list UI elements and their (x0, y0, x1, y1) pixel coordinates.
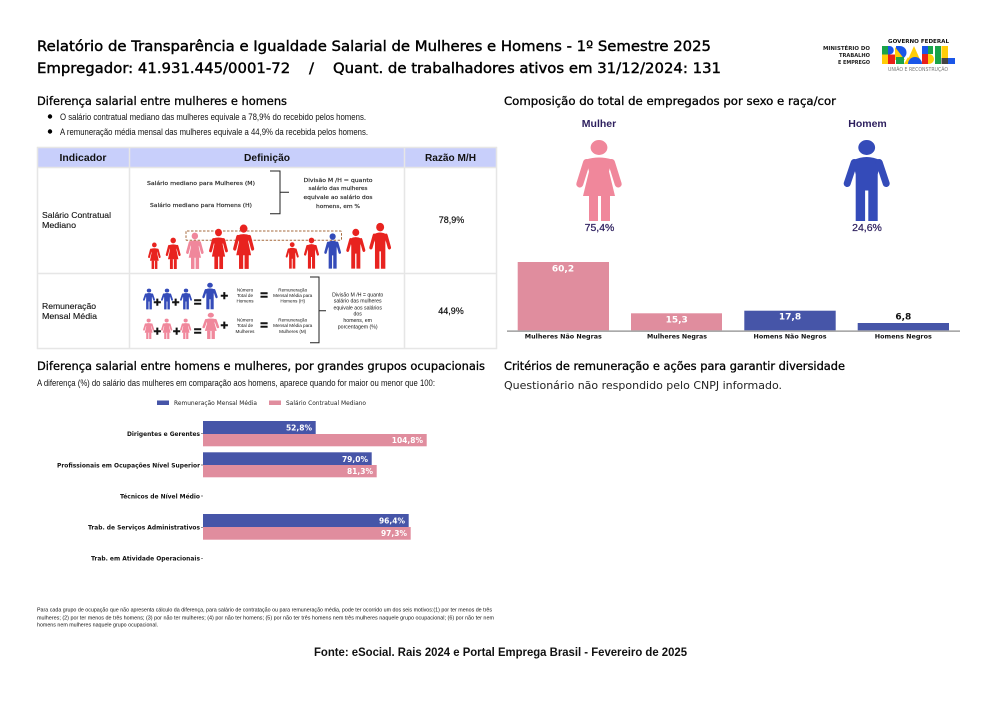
equation: men: Remuneração (278, 288, 308, 292)
ministry logo text: MINISTÉRIO DO (823, 44, 871, 52)
equation: men: Mensal Média para (273, 293, 313, 298)
bar chart: composition by sex and race: 15,3 (666, 316, 688, 326)
title: Relatório de Transparência e Igualdade Salarial de Mulheres e Homens - 1º Semestre 2025 (37, 39, 711, 55)
group: professionals: 81,3% (347, 467, 373, 476)
criteria text: Questionário não respondido pelo CNPJ informado. (504, 379, 782, 392)
group: managers: 52,8% (286, 424, 312, 432)
value: median ratio: 78,9% (439, 215, 464, 225)
median division text (304, 178, 373, 210)
equation: women: Mulheres (M) (279, 329, 307, 334)
group: professionals: Profissionais em Ocupações Nível Superior (57, 461, 201, 469)
group: administrative: Trab. de Serviços Administrativos (88, 524, 200, 532)
government of Brazil logo (882, 39, 955, 73)
pay division text: equivale aos salários (333, 306, 382, 312)
group: administrative (88, 514, 411, 540)
dashed median highlight (186, 231, 342, 240)
ministry logo text: E EMPREGO (838, 60, 871, 66)
legend: Remuneração Mensal Média (174, 399, 257, 407)
row: contractual salary label: Mediano (42, 220, 76, 230)
equation: women: + (221, 318, 229, 332)
row: contractual salary label: Salário Contratual (42, 210, 111, 220)
equation: women: = (194, 324, 202, 338)
row: contractual salary label (42, 210, 111, 230)
brace (310, 277, 326, 343)
bullet list (48, 112, 368, 137)
equation: men: + (172, 294, 180, 310)
man pictogram with share: 24,6% (852, 222, 882, 234)
table header: Definição (244, 153, 290, 164)
group: professionals (57, 452, 377, 477)
horizontal bar chart: occupational groups (57, 421, 427, 563)
equation: women: = (260, 318, 268, 332)
equation: men: Homens (236, 298, 254, 304)
icons: five men (287, 223, 389, 269)
equation: men: + (154, 294, 162, 310)
footnote: homens nem mulheres naquele grupo ocupacional. (37, 622, 158, 628)
median division text: homens, em % (316, 204, 360, 210)
footnote: mulheres; (2) por ter menos de três homens; (3) por não ter mulheres; (4) por não ter homens; (5) por não ter três homens nem três mulheres naquele grupo ocupacional; (6) por não ter nem (37, 616, 494, 622)
pay division text: porcentagem (%) (338, 324, 378, 330)
legend: Salário Contratual Mediano (286, 399, 366, 407)
equation: women: + (154, 324, 162, 338)
woman pictogram with share: Mulher (582, 118, 616, 130)
median salary definition text: Salário mediano para Mulheres (M) (147, 180, 255, 187)
equation: men (144, 283, 313, 310)
ministry logo text: TRABALHO (839, 53, 871, 59)
bar chart: composition by sex and race: Mulheres Negras (647, 332, 707, 340)
equation: women: + (173, 324, 181, 338)
bar chart: composition by sex and race (507, 262, 960, 340)
pay division text: Divisão M /H = quanto (332, 293, 383, 299)
equation: men: Homens (H) (280, 298, 306, 304)
table header: Razão M/H (425, 153, 476, 164)
government of Brazil logo: GOVERNO FEDERAL (888, 39, 949, 45)
row: average pay label (42, 301, 97, 321)
heading: occupational groups: Diferença salarial entre homens e mulheres, por grandes grupos ocupacionais (37, 359, 485, 373)
government of Brazil logo: UNIÃO E RECONSTRUÇÃO (888, 66, 948, 73)
pay division text: salário das mulheres (334, 299, 382, 305)
bullet list: O salário contratual mediano das mulheres equivale a 78,9% do recebido pelos homens. (60, 112, 366, 122)
occupational subtitle: A diferença (%) do salário das mulheres em comparação aos homens, aparece quando for maior ou menor que 100: (37, 378, 435, 388)
median salary definition text (147, 180, 255, 209)
table header (37, 147, 496, 167)
woman pictogram with share: 75,4% (585, 222, 614, 234)
equation: men: Total de (237, 293, 253, 298)
equation: women: Mensal Média para (273, 323, 313, 328)
bar chart: composition by sex and race: Mulheres Não Negras (525, 332, 602, 340)
group: managers: 104,8% (392, 436, 423, 445)
pay division text: dos (354, 312, 362, 318)
row: average pay label: Remuneração (42, 301, 96, 311)
group: operations: Trab. em Atividade Operacionais (91, 555, 200, 563)
pay division text (332, 293, 383, 330)
title: Empregador: 41.931.445/0001-72 / Quant. de trabalhadores ativos em 31/12/2024: 131 (37, 61, 721, 77)
row: average pay label: Mensal Média (42, 311, 97, 321)
group: professionals: 79,0% (342, 455, 368, 464)
equation: men: + (221, 288, 229, 303)
bar chart: composition by sex and race: 60,2 (552, 264, 574, 274)
equation: women: Número (237, 318, 254, 322)
equation: men: = (194, 294, 202, 310)
group: administrative: 97,3% (381, 529, 407, 538)
footnote (37, 608, 494, 628)
man pictogram with share (847, 118, 887, 234)
table (37, 147, 496, 348)
ministry logo text (823, 44, 871, 66)
table header: Indicador (60, 153, 107, 164)
median division text: equivale ao salário dos (304, 194, 373, 201)
equation: men: Número (237, 288, 254, 292)
bullet list: A remuneração média mensal das mulheres equivale a 44,9% da recebida pelos homens. (60, 127, 368, 137)
bar chart: composition by sex and race: Homens Não Negros (754, 332, 827, 340)
equation: men: = (260, 288, 268, 302)
pay division text: homens, em (343, 318, 372, 324)
group: administrative: 96,4% (379, 516, 405, 526)
group: managers (127, 421, 427, 446)
heading: criteria: Critérios de remuneração e ações para garantir diversidade (504, 359, 845, 373)
woman pictogram with share (580, 118, 618, 234)
median division text: Divisão M /H = quanto (304, 178, 373, 184)
man pictogram with share: Homem (848, 118, 887, 130)
group: technicians: Técnicos de Nível Médio (120, 492, 200, 500)
footnote: Para cada grupo de ocupação que não apresenta cálculo da diferença, para salário de contratação ou para remuneração média, pode ter ocorrido um dos seis motivos:(1) por ter menos de três (37, 608, 492, 614)
median salary definition text: Salário mediano para Homens (H) (150, 202, 252, 209)
heading: composition: Composição do total de empregados por sexo e raça/cor (504, 94, 836, 108)
bar chart: composition by sex and race: 6,8 (895, 313, 911, 323)
bar chart: composition by sex and race: Homens Negros (875, 332, 932, 340)
equation: women: Total de (237, 323, 253, 328)
equation: women (144, 313, 313, 339)
title (37, 39, 721, 77)
brace (270, 171, 289, 214)
legend (157, 399, 366, 407)
icons: five women (149, 225, 253, 269)
source: Fonte: eSocial. Rais 2024 e Portal Emprega Brasil - Fevereiro de 2025 (314, 645, 687, 659)
median division text: salário das mulheres (308, 185, 368, 192)
group: managers: Dirigentes e Gerentes (127, 430, 200, 438)
heading: salary difference: Diferença salarial entre mulheres e homens (37, 94, 287, 108)
value: pay ratio: 44,9% (438, 306, 464, 316)
equation: women: Mulheres (236, 329, 255, 334)
bar chart: composition by sex and race: 17,8 (779, 313, 801, 323)
equation: women: Remuneração (278, 318, 308, 322)
